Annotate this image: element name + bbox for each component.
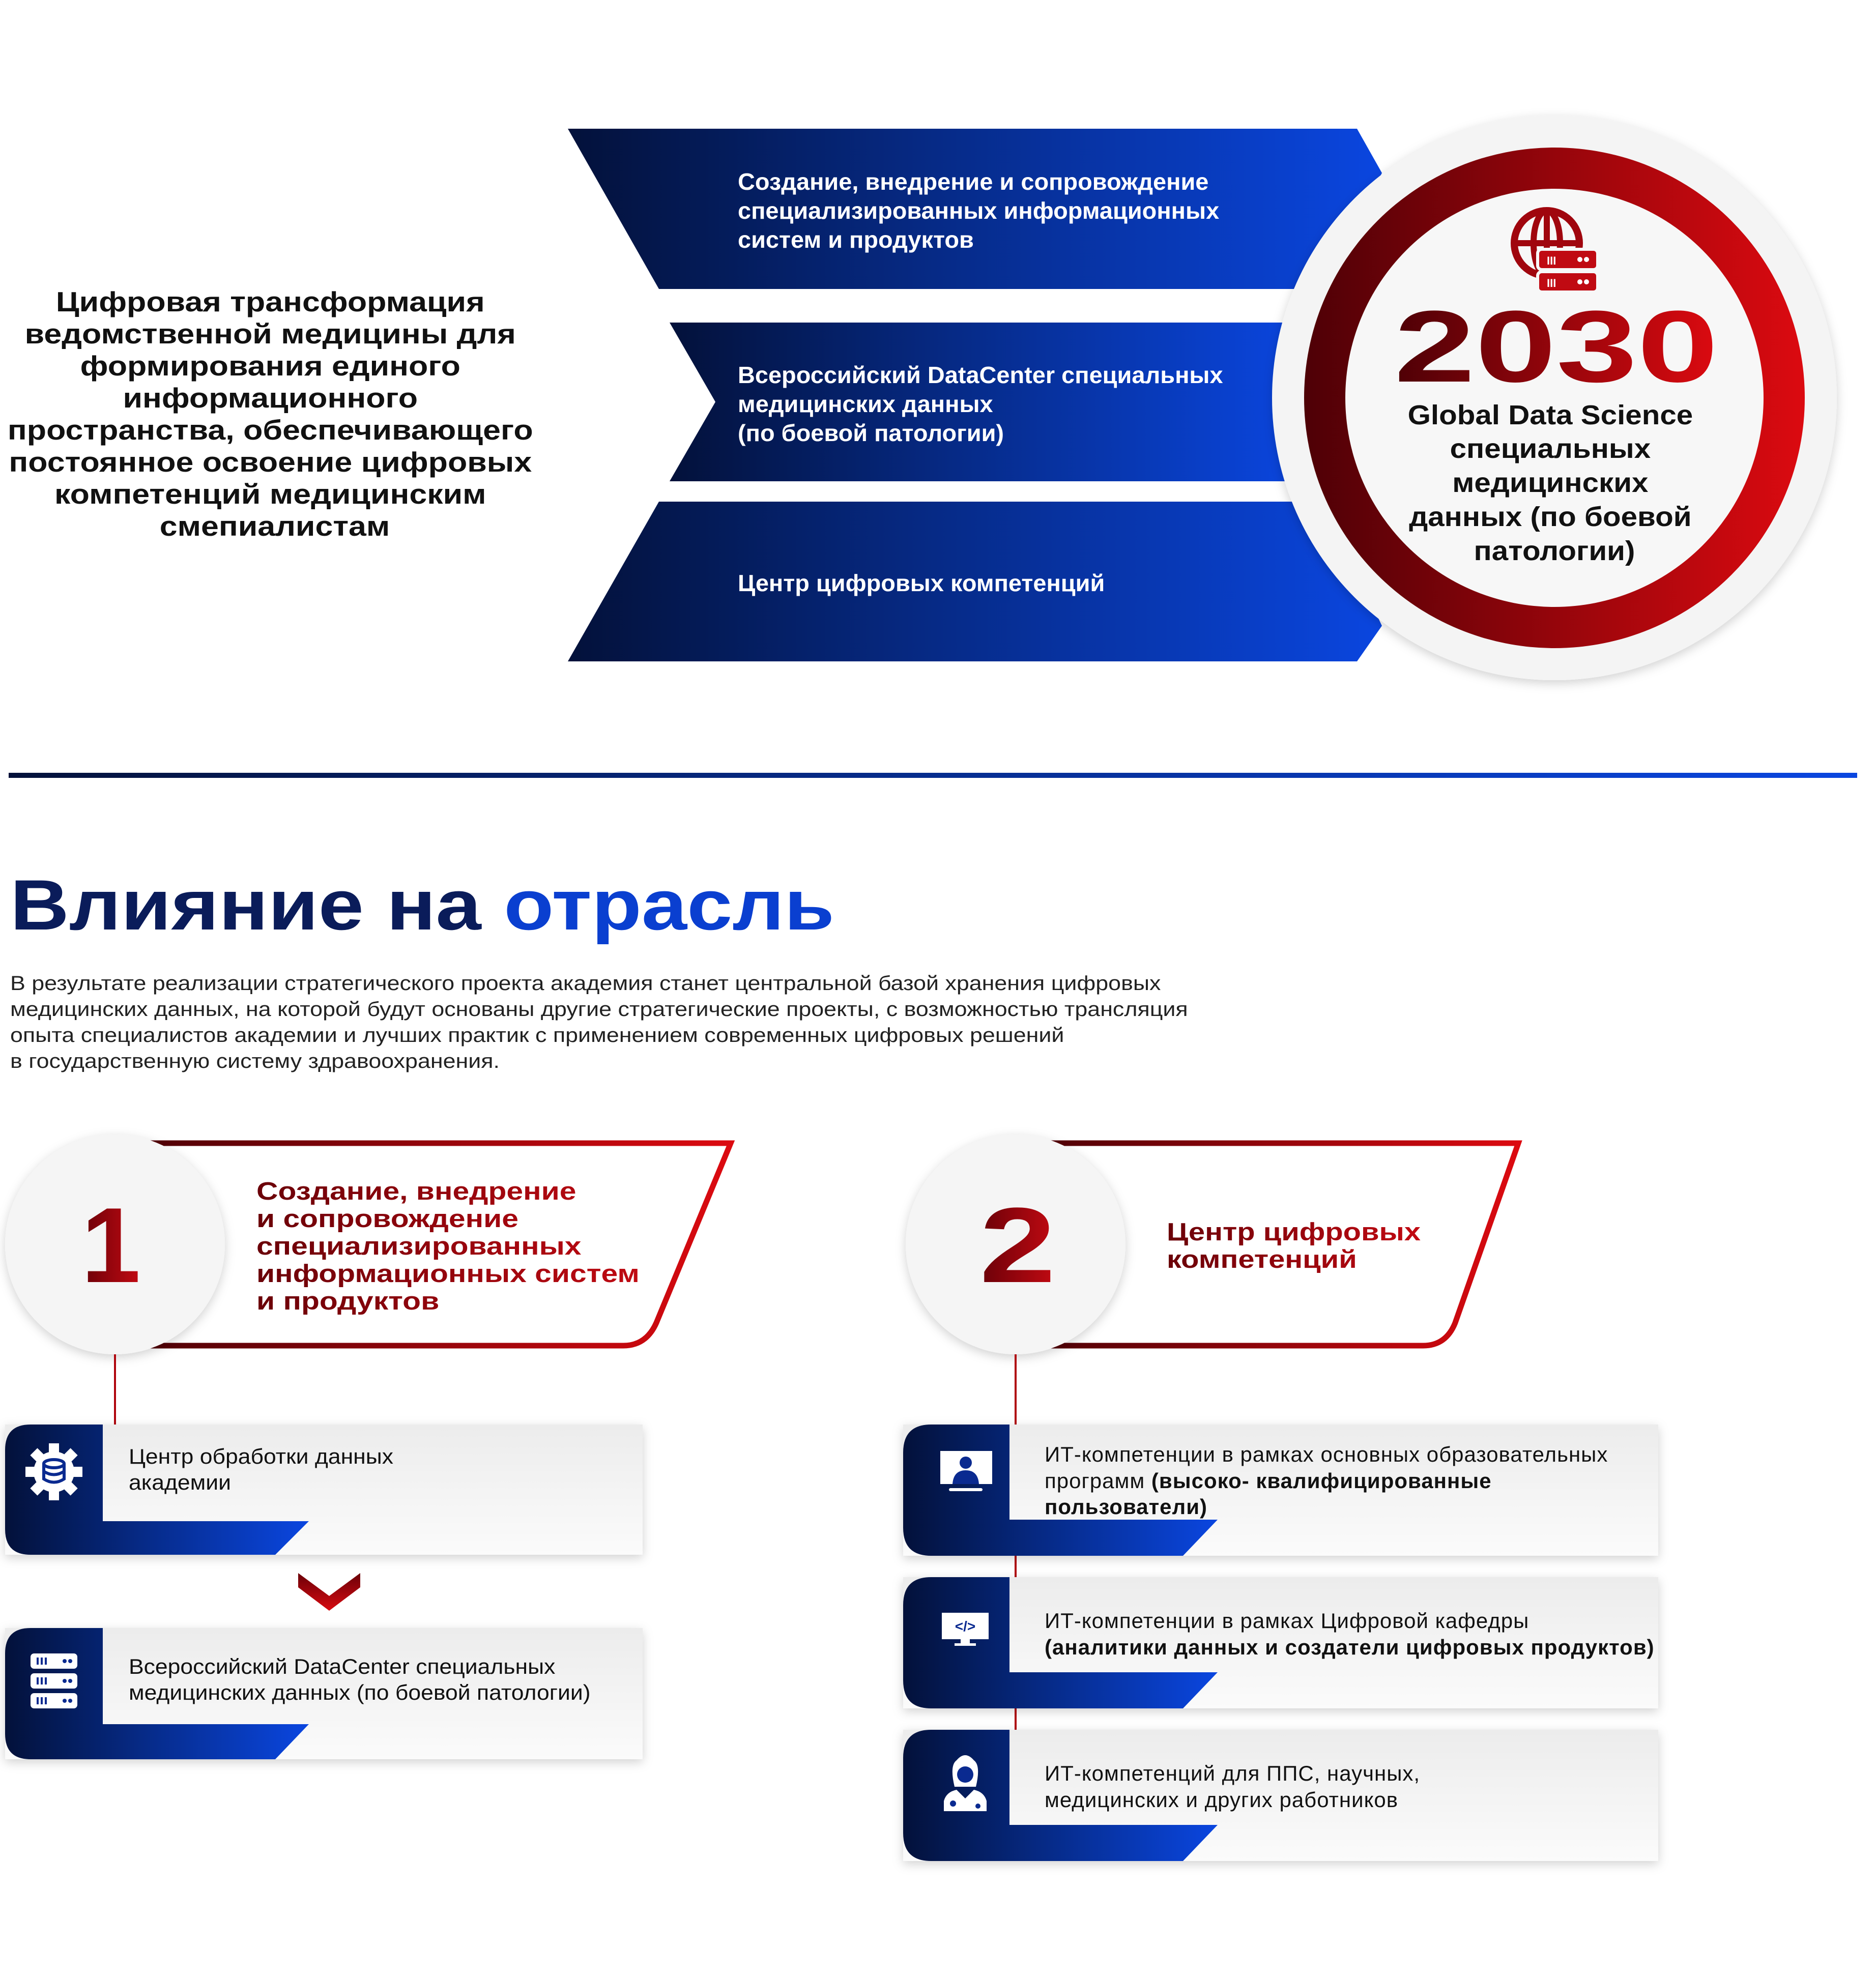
sub card: all-russian datacenter bbox=[5, 1628, 643, 1759]
panel 2 title: компетенций bbox=[1167, 1245, 1357, 1273]
sub card: data center: академии bbox=[129, 1471, 231, 1495]
sub card: IT competencies main programs: ИТ-компетенции в рамках основных образовательных bbox=[1045, 1442, 1608, 1466]
paragraph: медицинских данных, на которой будут основаны другие стратегические проекты, с возможностью трансляция bbox=[10, 998, 1188, 1020]
icon: server stack bbox=[31, 1653, 77, 1708]
panel 1 title: информационных систем bbox=[256, 1260, 640, 1288]
sub card: IT competencies for staff: медицинских и других работников bbox=[1045, 1788, 1398, 1812]
left description text: ведомственной медицины для bbox=[25, 319, 516, 350]
paragraph: опыта специалистов академии и лучших практик с применением современных цифровых решений bbox=[10, 1024, 1064, 1046]
band 3: Центр цифровых компетенций bbox=[738, 570, 1105, 596]
band 1: Создание, внедрение и сопровождение bbox=[738, 168, 1208, 195]
sub card: IT competencies digital department: (аналитики данных и создатели цифровых продуктов) bbox=[1045, 1635, 1655, 1659]
left description text: информационного bbox=[123, 383, 418, 414]
sub card: all-russian datacenter: медицинских данных (по боевой патологии) bbox=[129, 1681, 591, 1705]
paragraph: в государственную систему здравоохранения. bbox=[10, 1050, 500, 1072]
panel 2 title: Центр цифровых bbox=[1167, 1218, 1421, 1246]
left description text: компетенций медицинским bbox=[54, 479, 486, 510]
sub card: IT competencies digital department bbox=[903, 1577, 1658, 1708]
sub card: IT competencies main programs bbox=[903, 1425, 1658, 1556]
band 1 bbox=[568, 129, 1382, 289]
icon: doctor bbox=[944, 1755, 987, 1811]
panel 1 title: специализированных bbox=[256, 1233, 581, 1260]
heading: Влияние на отрасль bbox=[10, 865, 834, 945]
paragraph: В результате реализации стратегического проекта академия станет центральной базой хранения цифровых bbox=[10, 972, 1161, 994]
left description text: пространства, обеспечивающего bbox=[8, 415, 533, 446]
band 3 bbox=[568, 502, 1382, 661]
panel 1 header bbox=[5, 1135, 731, 1354]
circle caption: медицинских bbox=[1452, 467, 1648, 498]
number circle 2 bbox=[906, 1135, 1125, 1354]
icon: gear database bbox=[25, 1443, 82, 1500]
icon: globe server: III bbox=[1547, 277, 1556, 289]
left description text bbox=[8, 287, 542, 542]
sub card: IT competencies for staff: ИТ-компетенций для ППС, научных, bbox=[1045, 1761, 1420, 1785]
band 1: специализированных информационных bbox=[738, 197, 1219, 224]
circle caption: Global Data Science bbox=[1408, 399, 1693, 430]
sub card: IT competencies for staff bbox=[903, 1730, 1658, 1861]
icon: monitor code bbox=[942, 1613, 989, 1646]
band 2: медицинских данных bbox=[738, 391, 993, 417]
panel 1 title: и продуктов bbox=[256, 1288, 439, 1315]
circle caption: специальных bbox=[1450, 433, 1651, 464]
number circle 1 bbox=[5, 1135, 225, 1354]
sub card: data center: Центр обработки данных bbox=[129, 1445, 393, 1469]
band 2: Всероссийский DataCenter специальных bbox=[738, 362, 1223, 388]
panel 2 header bbox=[906, 1135, 1518, 1354]
icon: globe server bbox=[1514, 211, 1598, 292]
band 2 bbox=[670, 323, 1303, 481]
circle: 2030 goal bbox=[1272, 115, 1837, 680]
sub card: IT competencies main programs: программ (высоко- квалифицированные bbox=[1045, 1469, 1492, 1493]
left description text: постоянное освоение цифровых bbox=[9, 447, 532, 478]
left description text: Цифровая трансформация bbox=[56, 287, 485, 317]
divider bbox=[9, 773, 1857, 778]
panel 1 title: и сопровождение bbox=[256, 1205, 518, 1233]
sub card: data center bbox=[5, 1425, 643, 1555]
icon: monitor code: </> bbox=[955, 1618, 975, 1634]
year 2030: 2030 bbox=[1394, 290, 1718, 403]
number circle 2: 2 bbox=[979, 1185, 1056, 1305]
left description text: формирования единого bbox=[80, 351, 460, 382]
paragraph bbox=[10, 972, 1194, 1072]
left description text: смепиалистам bbox=[160, 511, 390, 542]
arrow: down chevron bbox=[298, 1573, 360, 1611]
circle caption: патологии) bbox=[1474, 535, 1635, 566]
icon: globe server: III bbox=[1547, 254, 1556, 267]
band 2: (по боевой патологии) bbox=[738, 420, 1004, 446]
number circle 1: 1 bbox=[81, 1185, 140, 1305]
circle caption: данных (по боевой bbox=[1409, 501, 1692, 532]
panel 1 title: Создание, внедрение bbox=[256, 1178, 576, 1205]
icon: monitor user bbox=[940, 1451, 992, 1491]
sub card: IT competencies digital department: ИТ-компетенции в рамках Цифровой кафедры bbox=[1045, 1609, 1529, 1633]
sub card: all-russian datacenter: Всероссийский DataCenter специальных bbox=[129, 1655, 556, 1679]
band 1: систем и продуктов bbox=[738, 226, 974, 253]
sub card: IT competencies main programs: пользователи) bbox=[1045, 1495, 1207, 1519]
